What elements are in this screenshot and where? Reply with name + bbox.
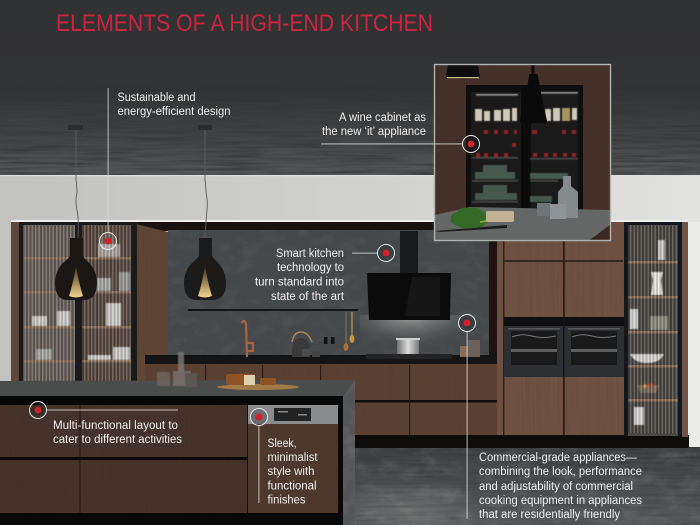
twin ovens xyxy=(504,317,624,377)
inset decanter and glasses xyxy=(537,176,578,219)
inset marble counter xyxy=(435,207,611,240)
island black frame xyxy=(0,396,343,525)
bread board xyxy=(217,374,299,390)
countertop xyxy=(145,355,497,364)
wall xyxy=(0,175,700,448)
wine bottles xyxy=(472,92,578,203)
copper tap xyxy=(242,321,253,357)
callout: wine cabinet: the new ‘it’ appliance xyxy=(322,126,426,138)
hob and pot xyxy=(366,338,452,359)
callout: sleek minimalist style: minimalist xyxy=(268,452,318,464)
island wood fronts xyxy=(0,405,338,513)
callout: smart kitchen technology xyxy=(255,244,394,303)
shelves xyxy=(24,257,131,362)
callout: commercial-grade appliances: cooking equipment in appliances xyxy=(479,495,642,507)
callout: smart kitchen technology: state of the art xyxy=(271,291,345,303)
plinth xyxy=(145,435,689,448)
callout: commercial-grade appliances: Commercial-grade appliances— xyxy=(479,452,637,464)
callout: commercial-grade appliances: combining the look, performance xyxy=(479,466,642,478)
callout: sustainable design: Sustainable and xyxy=(118,92,196,104)
jars by hob xyxy=(460,340,480,357)
pendant lamp right xyxy=(184,125,226,300)
callout: commercial-grade appliances: that are residentially friendly xyxy=(479,509,620,521)
callout: sleek minimalist style: functional xyxy=(268,480,316,492)
shelves xyxy=(628,261,678,402)
callout: wine cabinet xyxy=(321,112,480,152)
callout: sleek minimalist style: finishes xyxy=(268,494,306,506)
backsplash xyxy=(168,230,497,360)
kitchen island xyxy=(0,380,355,525)
callout: multi-functional layout: cater to different activities xyxy=(53,434,182,446)
callout: wine cabinet: A wine cabinet as xyxy=(339,112,426,124)
callout: commercial-grade appliances xyxy=(458,314,642,521)
inset cone pendant xyxy=(520,64,548,123)
floor xyxy=(0,447,700,525)
dishwasher control panel xyxy=(248,405,338,424)
left glass cabinet xyxy=(19,222,137,442)
inset frame xyxy=(434,64,610,240)
inset small lamp xyxy=(446,65,480,78)
title: ELEMENTS OF A HIGH-END KITCHEN xyxy=(56,10,433,37)
glasses on island xyxy=(157,352,197,387)
callout: sleek minimalist style: Sleek, xyxy=(268,438,296,450)
wine cabinet inset xyxy=(434,64,611,241)
wine cabinet body xyxy=(466,85,583,211)
range hood xyxy=(367,231,451,320)
left cabinet wall panel xyxy=(11,222,20,392)
callout: smart kitchen technology: turn standard into xyxy=(255,276,344,288)
objects on shelves xyxy=(630,240,668,425)
callout: multi-functional layout: Multi-functional layout to xyxy=(53,420,178,432)
island countertop xyxy=(0,380,355,396)
ceiling background xyxy=(0,106,700,175)
tableware xyxy=(32,244,130,360)
tall cabinets xyxy=(497,222,624,436)
callout: multi-functional layout xyxy=(30,402,182,446)
inset herbs xyxy=(451,208,489,228)
right glass cabinet xyxy=(624,222,682,436)
kettle xyxy=(292,332,320,357)
hanging utensils xyxy=(324,312,354,351)
callout: sleek minimalist style: style with xyxy=(268,466,314,478)
callout: sleek minimalist style xyxy=(250,408,318,506)
back kitchen run xyxy=(11,222,689,448)
soffit xyxy=(136,222,504,231)
base cabinets xyxy=(145,362,498,447)
island side xyxy=(343,380,355,525)
callout: commercial-grade appliances: and adjustability of commercial xyxy=(479,481,633,493)
pendant lamp left xyxy=(55,125,97,300)
inset cake xyxy=(486,211,514,222)
callout: smart kitchen technology: Smart kitchen xyxy=(276,248,344,260)
side panel xyxy=(136,224,168,392)
callout: smart kitchen technology: technology to xyxy=(277,262,344,274)
callout: sustainable design: energy-efficient design xyxy=(118,106,230,118)
callout: sustainable design xyxy=(100,88,230,250)
